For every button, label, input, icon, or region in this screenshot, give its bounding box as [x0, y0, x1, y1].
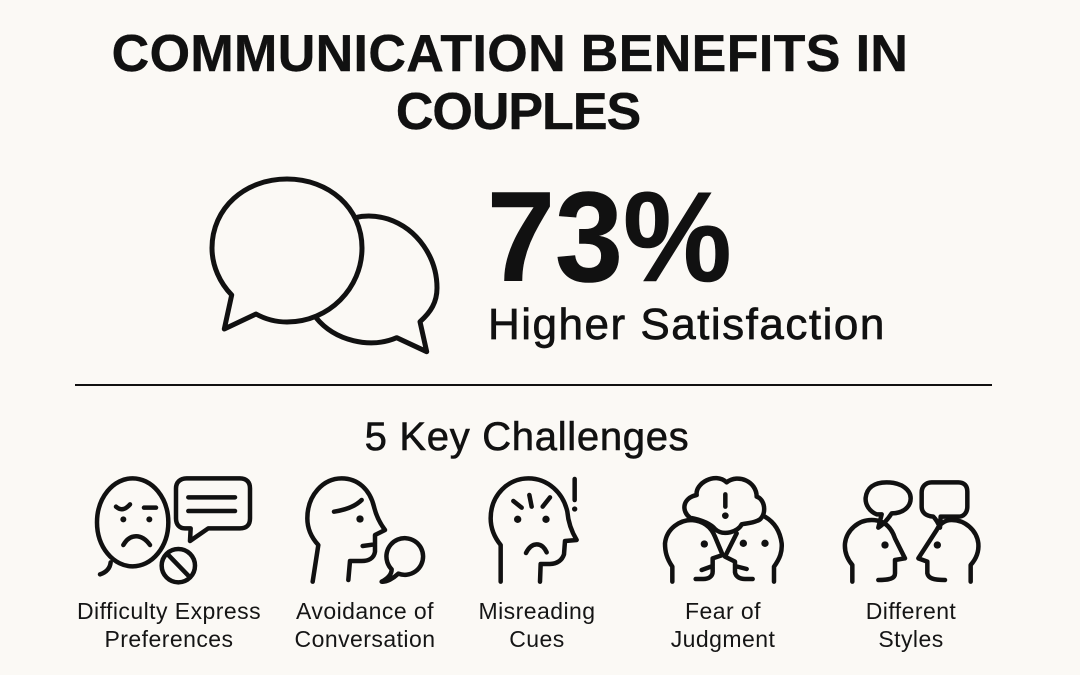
label: Difficulty Express: [77, 598, 261, 624]
section heading: 5 Key Challenges: [365, 415, 689, 459]
label: Judgment: [671, 626, 775, 652]
label: Conversation: [295, 626, 435, 652]
label: [671, 598, 775, 652]
label: [77, 598, 261, 652]
label: Misreading: [478, 598, 596, 624]
label: [478, 598, 596, 652]
label: Different: [866, 598, 956, 624]
label: Preferences: [105, 626, 233, 652]
title: [112, 25, 908, 141]
title: COMMUNICATION BENEFITS IN: [112, 25, 908, 83]
label: Cues: [509, 626, 565, 652]
label: [866, 598, 956, 652]
statistic label: Higher Satisfaction: [488, 300, 886, 349]
label: Styles: [878, 626, 944, 652]
label: [295, 598, 435, 652]
divider line: [75, 384, 992, 386]
label: Avoidance of: [296, 598, 434, 624]
statistic: 73%: 73%: [487, 166, 732, 309]
label: Fear of: [685, 598, 761, 624]
title: COUPLES: [396, 83, 640, 141]
